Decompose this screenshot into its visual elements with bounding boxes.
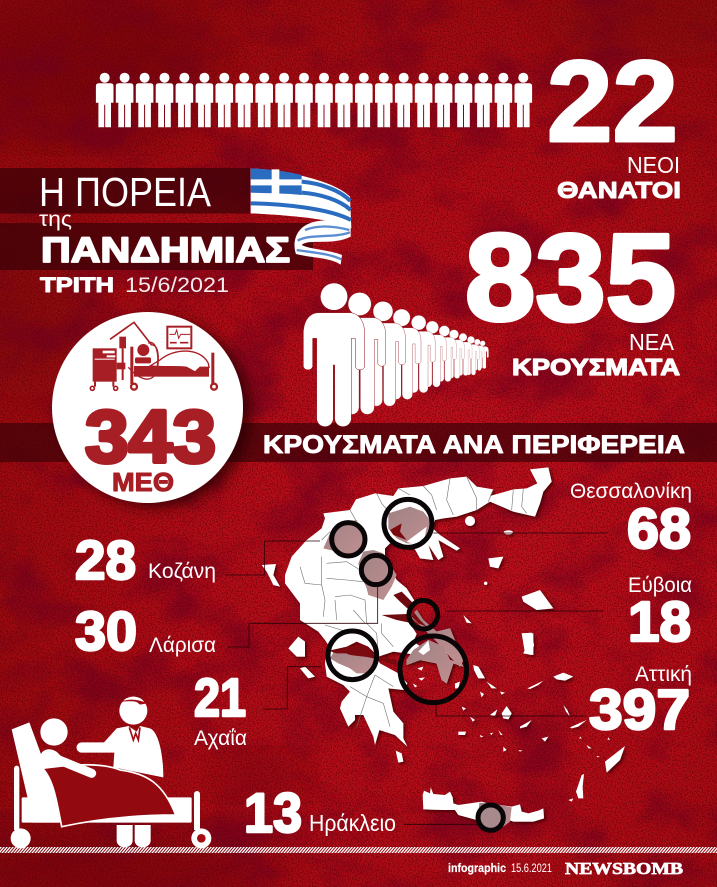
stat: Thessaloniki: Θεσσαλονίκη [570,480,692,503]
date: 15/6/2021 [125,274,229,297]
stat: Kozani [75,529,216,591]
footer credit [448,863,552,875]
hatched footer strip [0,847,717,853]
gulfs [332,523,427,665]
Newsbomb logo: NEWSBOMB [565,859,683,878]
Heraklion circle [478,805,503,830]
stat: Attica: Αττική [635,663,692,686]
cases count 835: 835 [465,210,676,347]
gulf shading [382,592,413,623]
icon: ICU bed and machines [90,322,217,390]
Heraklion region [477,803,512,832]
footer credit: infographic [448,863,507,875]
stat: Larisa: 30 [75,600,137,662]
Crete island [423,787,544,822]
stat: Kozani: 28 [75,529,136,591]
date weekday: ΤΡΙΤΗ [40,274,114,297]
stat: Evia: 18 [628,590,691,654]
stat: Evia: Εύβοια [628,574,692,597]
highlight circles [328,499,467,703]
map of Greece [225,467,625,773]
label: deaths: ΘΑΝΑΤΟΙ [557,177,681,203]
Karpathos [568,774,584,802]
white peninsula and islets [407,527,460,688]
leader line [404,823,478,826]
stat: Thessaloniki: 68 [627,497,691,561]
icon: doctor and patient in bed [11,697,211,848]
heading: cases per region: ΚΡΟΥΣΜΑΤΑ ΑΝΑ ΠΕΡΙΦΕΡΕΙΑ [263,431,685,459]
stat: Achaia [194,668,247,750]
label: cases: ΚΡΟΥΣΜΑΤΑ [512,354,680,380]
stat: Heraklion: 13 [244,781,302,844]
icon: queue of people [303,283,489,427]
label: new cases: ΝΕΑ [629,329,674,355]
title band one [0,168,250,214]
big dark band behind regional heading [0,423,717,462]
title band two [0,223,313,270]
ICU label: ΜΕΘ [112,467,174,497]
deaths count 22: 22 [547,38,678,166]
stat: Larisa [75,600,216,662]
stat: Kozani: Κοζάνη [148,560,216,583]
highlighted regions [323,507,463,683]
title small word: της [39,208,72,231]
region borders [300,477,527,727]
stat: Larisa: Λάρισα [149,634,216,657]
stat: Heraklion [244,781,396,844]
leader lines [225,533,608,716]
row of 22 person icons [96,73,532,127]
label: new: ΝΕΟΙ [627,152,680,178]
stat: Heraklion: Ηράκλειο [309,810,396,836]
mainland and islands [262,467,625,773]
ICU count 343: 343 [85,395,216,478]
white circle [52,312,243,503]
stat: Attica: 397 [589,678,690,742]
stat: Achaia: Αχαΐα [194,727,247,750]
footer credit: 15.6.2021 [511,863,552,875]
icon: Greek flag ribbon [251,168,351,265]
Peloponnese [325,652,407,747]
map of Crete with Heraklion marker [404,774,584,832]
title line one: Η ΠΟΡΕΙΑ [39,169,211,215]
stat: Thessaloniki [570,480,692,561]
stat: Achaia: 21 [194,668,246,728]
title line two: ΠΑΝΔΗΜΙΑΣ [41,231,290,270]
panel: ICU circle [52,312,243,503]
